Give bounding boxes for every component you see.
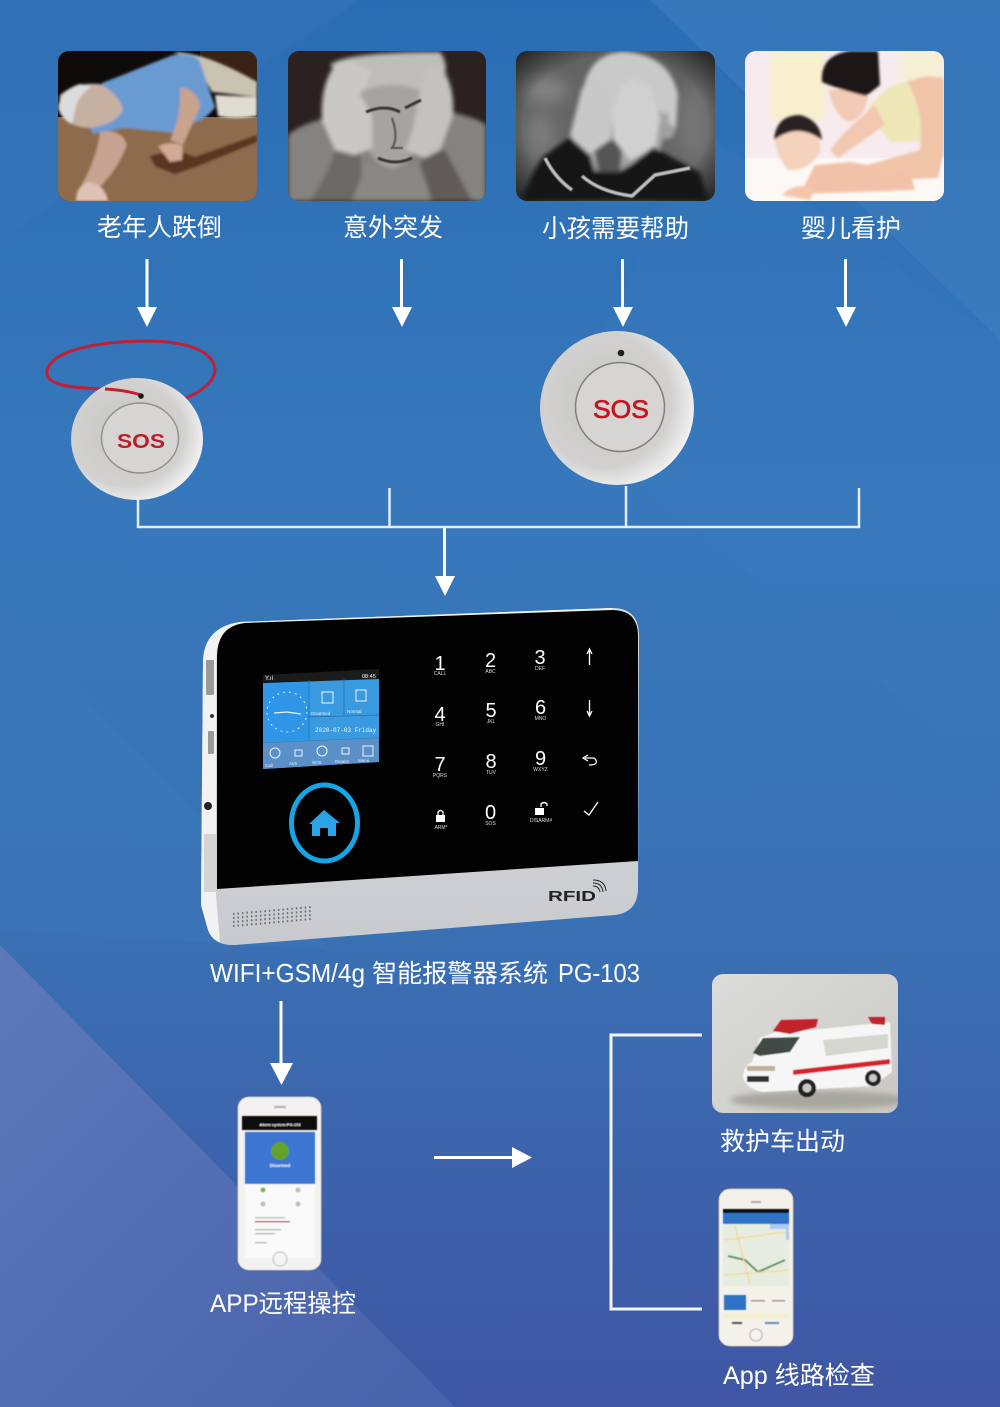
SOS button large: SOS [593,396,649,424]
photo: man with head in hands [288,51,486,201]
keypad: PQRS [433,773,448,779]
arrow to app [270,1001,293,1085]
keypad: TUV [486,770,497,776]
keypad: 3 [534,647,546,669]
keypad: 8 [485,751,497,773]
keypad: 1 [434,653,446,675]
photo: elderly person fallen [58,51,257,201]
phone: app remote control [238,1097,321,1270]
keypad: MNO [535,716,546,722]
keypad: 9 [535,748,546,770]
keypad: 7 [434,754,446,776]
LCD screen: Normal [347,709,362,714]
label: child needs help: 小孩需要帮助 [542,215,689,243]
arrow to outcomes [434,1147,532,1168]
keypad: 6 [535,697,546,719]
RFID logo [548,880,606,905]
label: app remote: APP远程操控 [210,1290,356,1318]
arrow 2 [392,259,412,327]
bracket connector [611,1035,702,1309]
speaker grille [233,907,312,926]
keypad: DEF [535,666,545,672]
LCD screen: Disarm [335,759,350,764]
keypad: 5 [485,700,497,722]
photo: child covering face [516,51,715,201]
LCD screen: 08:45 [362,674,376,680]
keypad: 4 [434,704,446,726]
alarm panel device [201,608,639,945]
keypad: JKL [487,719,496,725]
product caption: WIFI+GSM/4g [210,958,365,988]
keypad: 0 [485,802,496,824]
arrow to alarm panel [435,528,455,596]
label: baby care: 婴儿看护 [801,215,901,243]
arrow 1 [137,259,157,327]
RFID logo: RFID [548,889,596,905]
LCD screen: Disarmed [311,711,331,716]
arrow 4 [836,259,856,327]
product caption: PG-103 [558,958,640,988]
label: elderly fall: 老年人跌倒 [97,214,222,242]
keypad: ARM* [434,825,448,831]
keypad: ABC [485,669,496,675]
phone: app remote control: Disarmed [270,1163,291,1168]
LCD screen: Arm [289,761,298,766]
LCD screen: 2020-07-03 Friday [315,727,377,734]
arrow 3 [613,259,633,327]
black front panel [217,610,638,889]
LCD screen: Y.ıl [265,676,273,682]
LCD screen [263,669,379,769]
photo: baby care [745,51,944,201]
label: app route check: App 线路检查 [723,1362,875,1390]
product caption: 智能报警器系统 [372,960,548,988]
SOS button large [540,331,694,485]
product caption [210,958,640,988]
phone: app remote control: Alarm system PG-103 [259,1122,301,1127]
keypad: DISARM# [530,818,552,824]
keypad: GHI [436,722,444,728]
home button [292,785,358,861]
keypad: CALL [434,671,446,677]
LCD screen: Menu [358,758,370,763]
LCD screen: Call [265,763,273,768]
keypad [433,647,598,831]
SOS pendant button with lanyard [47,341,215,500]
label: accident: 意外突发 [343,214,443,242]
keypad: 2 [485,650,496,672]
photo: ambulance [712,974,910,1113]
side ports [204,660,216,892]
keypad: SOS [485,821,496,827]
label: ambulance dispatched: 救护车出动 [720,1128,845,1156]
connector lines [138,486,859,527]
phone: route map [719,1189,793,1346]
SOS pendant button with lanyard: SOS [117,431,165,453]
keypad: WXYZ [533,767,548,773]
device body [201,608,639,945]
LCD screen: SOS [312,760,322,765]
